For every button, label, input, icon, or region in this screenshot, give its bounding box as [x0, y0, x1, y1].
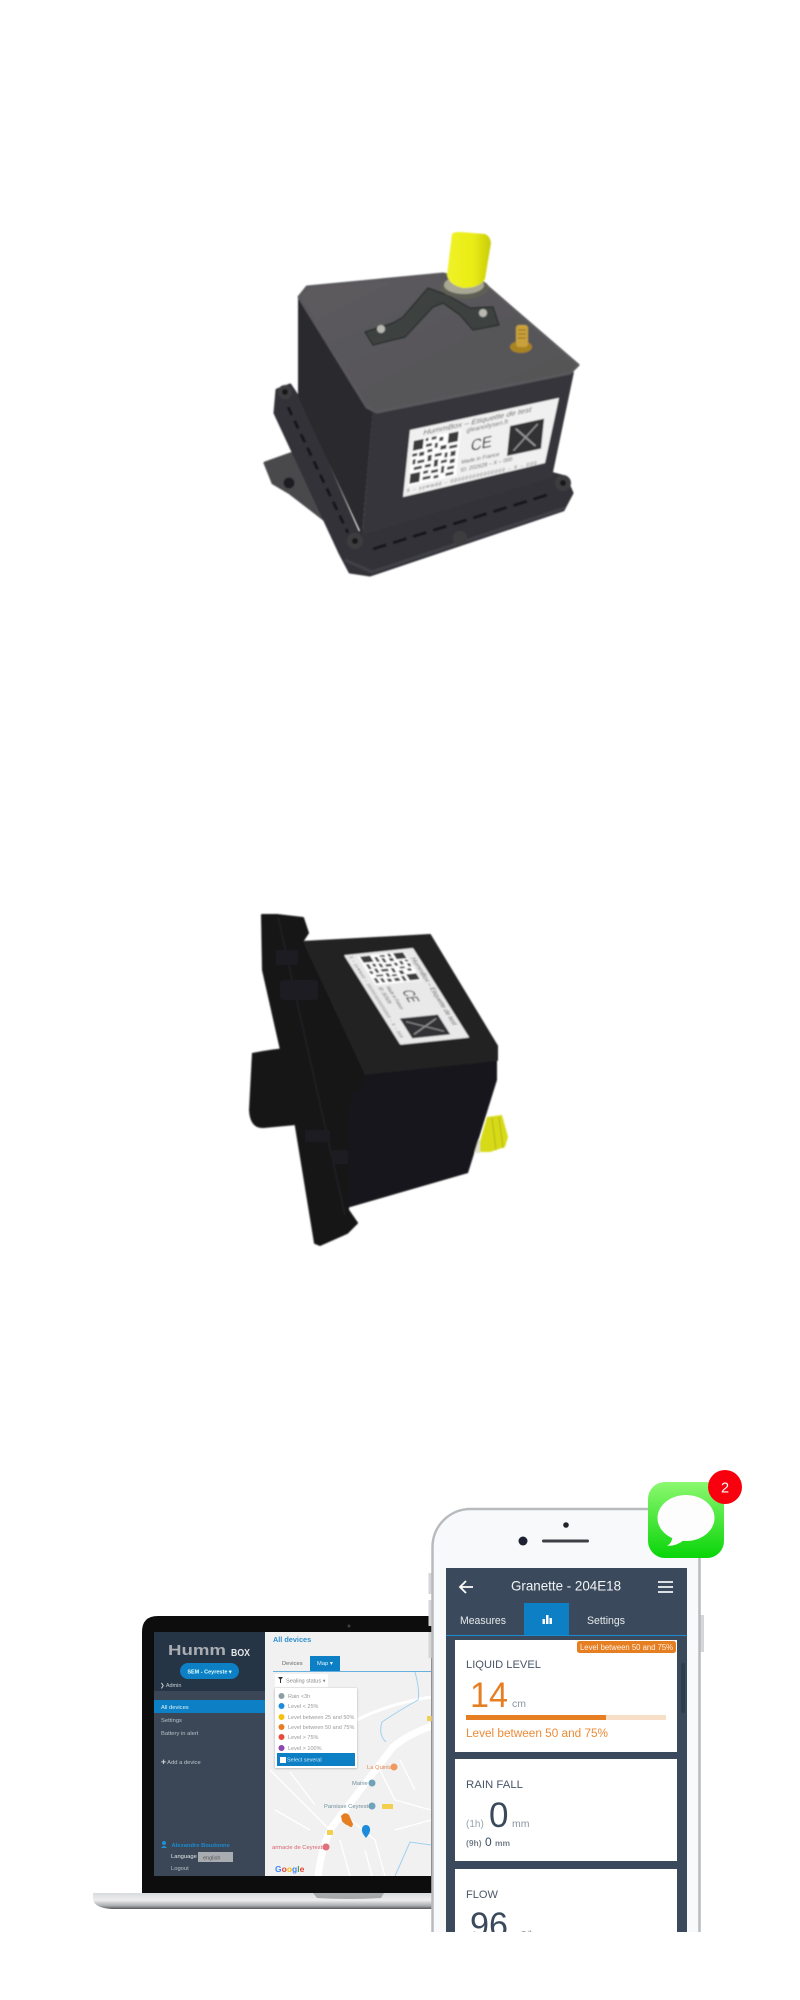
orange map marker: [341, 1813, 353, 1827]
map labels: armacie de Ceyreste: [272, 1845, 325, 1851]
hamburger menu: [658, 1582, 673, 1592]
sidebar: [154, 1632, 265, 1876]
back arrow: [460, 1581, 473, 1593]
label: [403, 398, 559, 497]
value 96: 96: [470, 1906, 508, 1945]
main panel with map: [265, 1632, 435, 1876]
mounting plate: [265, 453, 325, 520]
map labels: Mairie: [352, 1781, 368, 1787]
gold connector: [510, 325, 532, 353]
9h row: (9h): [466, 1838, 482, 1848]
card: rain fall: [455, 1759, 677, 1861]
body lower face: [330, 1050, 497, 1208]
made in France: Made in France: [384, 986, 405, 1010]
unit: m3/h: [512, 1929, 536, 1941]
menu: settings: Settings: [161, 1718, 182, 1724]
unit mm: mm: [512, 1818, 530, 1830]
9h row: mm: [495, 1838, 511, 1848]
active chart tab: [524, 1603, 569, 1635]
laptop base: [93, 1893, 440, 1909]
nut: [441, 276, 489, 298]
9h row: 0: [485, 1835, 492, 1849]
tab: settings: Settings: [587, 1615, 625, 1627]
dropdown legend: [275, 1688, 357, 1768]
label title: HummBox – Etiquette de test: [408, 957, 459, 1026]
status tag: Level between 50 and 75%: [580, 1643, 673, 1652]
CE mark: CE: [470, 433, 493, 455]
WEEE icon: [507, 419, 544, 456]
tab: map: [310, 1656, 340, 1671]
tab rule: [446, 1635, 687, 1636]
1h prefix: (1h): [466, 1819, 484, 1830]
logout: Logout: [171, 1866, 189, 1872]
logo: [168, 1642, 250, 1659]
laptop lid: [142, 1616, 440, 1893]
unit cm: cm: [512, 1698, 526, 1710]
card heading: FLOW: [466, 1889, 499, 1901]
label title: HummBox – Etiquette de test: [423, 405, 533, 437]
yellow cap side: [475, 1115, 508, 1153]
serial: X – yywwdd – 000000000000000 – X – 000: [348, 956, 405, 1038]
map labels: La Quinta: [367, 1765, 393, 1771]
WEEE icon: [400, 1015, 450, 1038]
phone side buttons: [428, 1573, 704, 1658]
account pill: SEM - Ceyreste ▾: [187, 1670, 233, 1676]
card: flow: [455, 1869, 677, 1932]
filter button: Sealing status ▾: [286, 1678, 326, 1684]
dropdown legend: Level between 50 and 75%: [288, 1725, 354, 1731]
messages app icon: [648, 1470, 742, 1558]
add device: ✚ Add a device: [161, 1759, 201, 1766]
CE mark: CE: [398, 989, 424, 1003]
user name: Alexandre Boudonne: [172, 1843, 231, 1849]
card heading: RAIN FALL: [466, 1779, 523, 1791]
map roads: [270, 1672, 435, 1876]
dropdown legend: Level > 75%: [288, 1735, 319, 1741]
dropdown legend: Level > 100%: [288, 1746, 322, 1752]
value 0: 0: [489, 1796, 508, 1835]
device photo: HummBox side view: [249, 915, 508, 1245]
language selector: [171, 1852, 233, 1862]
language selector: Language: [171, 1854, 197, 1860]
active menu item: [154, 1700, 265, 1713]
tab rule: [273, 1670, 431, 1673]
body left face: [298, 297, 373, 535]
logo: Humm: [168, 1642, 226, 1659]
sensor: [563, 1522, 569, 1528]
flange side: [262, 915, 365, 1245]
speech bubble: [658, 1495, 714, 1546]
speaker: [542, 1540, 589, 1542]
card heading: LIQUID LEVEL: [466, 1659, 541, 1671]
top plate: [299, 274, 578, 412]
level caption: Level between 50 and 75%: [466, 1728, 608, 1740]
account pill: [180, 1663, 239, 1679]
device photo: HummBox top view: [265, 232, 578, 575]
dropdown legend: Level between 25 and 50%: [288, 1715, 354, 1721]
id text: ID: 202628: [376, 987, 393, 1004]
label: [344, 948, 469, 1045]
id text: ID: 202628 – X – 000: [460, 457, 513, 474]
QR code: [408, 430, 461, 486]
screen title: Granette - 204E18: [511, 1578, 621, 1594]
tab: devices: Devices: [282, 1661, 303, 1667]
card: liquid level: [455, 1640, 677, 1752]
notification badge: 2: [721, 1480, 729, 1496]
laptop camera: [348, 1624, 350, 1628]
tab: map: Map ▾: [317, 1661, 333, 1667]
body right face: [362, 372, 574, 535]
panel heading: All devices: [273, 1635, 311, 1644]
made in France: Made in France: [461, 452, 500, 466]
front camera: [518, 1536, 528, 1546]
handle bracket: [365, 288, 499, 345]
map labels: Paroisse Ceyreste: [324, 1804, 371, 1810]
9h row: [466, 1838, 510, 1848]
menu: battery: Battery in alert: [161, 1731, 199, 1737]
admin link: ❯ Admin: [160, 1682, 181, 1689]
cylinder port: [249, 1047, 296, 1128]
website text: gleanoilysen.fr: [466, 418, 510, 434]
QR code: [358, 952, 422, 985]
language selector: english: [203, 1856, 220, 1862]
active menu item: All devices: [161, 1705, 189, 1711]
dropdown legend: Rain <3h: [288, 1694, 310, 1700]
phone mockup: [428, 1509, 704, 1979]
dropdown legend: Select several: [287, 1758, 322, 1764]
serial: X – yywwdd – 000000000000000 – X – 000: [406, 460, 537, 494]
level bar: [466, 1715, 666, 1720]
scrollbar: [681, 1663, 685, 1713]
flange: [275, 385, 572, 575]
laptop mockup: [93, 1616, 440, 1909]
phone body: [432, 1509, 700, 1979]
logo: BOX: [231, 1647, 250, 1659]
tab: measures: Measures: [460, 1615, 506, 1627]
map labels: [272, 1716, 433, 1851]
filter button: [275, 1674, 328, 1687]
dropdown legend: Level < 25%: [288, 1704, 319, 1710]
body label face: [302, 935, 497, 1074]
blue map marker: [362, 1825, 370, 1838]
value 14: 14: [470, 1676, 508, 1715]
user name: [161, 1841, 231, 1849]
phone screen: [446, 1568, 687, 1968]
yellow cap: [447, 232, 491, 288]
google logo: Google: [275, 1864, 305, 1874]
